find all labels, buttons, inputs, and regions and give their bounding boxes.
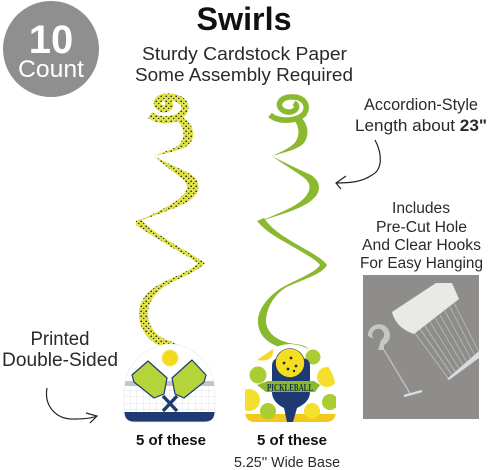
badge: 10 count: 10 (29, 18, 73, 62)
text: includes hooks (360, 200, 483, 272)
text: accordion-style length: Length about 23" (355, 117, 487, 135)
text: includes hooks: For Easy Hanging (360, 255, 483, 272)
icon: crossed handles (163, 396, 177, 411)
label: 5 of these left: 5 of these (136, 432, 206, 449)
title: Swirls (196, 1, 292, 37)
icon: right paddle (172, 360, 206, 398)
swirl base: pickleball banner (245, 344, 336, 422)
banner: PICKLEBALL (267, 382, 313, 394)
badge: 10 count: Count (18, 56, 84, 83)
arrow: to base (47, 388, 97, 423)
icon: ball (276, 348, 304, 378)
subtitle: Sturdy Cardstock Paper (142, 43, 347, 64)
arrow: to swirl length (336, 140, 380, 189)
label: printed double-sided (2, 329, 118, 371)
label: 5 of these right: 5 of these (257, 432, 327, 449)
text: accordion-style length: Accordion-Style (364, 96, 478, 114)
photo: clear hooks (363, 275, 479, 419)
swirl: green (257, 97, 327, 350)
subtitle (135, 43, 353, 85)
icon: left paddle (132, 361, 167, 398)
swirl: speckled (136, 97, 205, 349)
label: printed double-sided: Double-Sided (2, 350, 118, 371)
text: accordion-style length (355, 96, 487, 135)
swirl base: crossed paddles (124, 344, 216, 422)
subtitle: Some Assembly Required (135, 64, 353, 85)
icon: ball (162, 350, 178, 366)
text: includes hooks: And Clear Hooks (362, 237, 481, 254)
label: printed double-sided: Printed (30, 329, 90, 350)
badge: 10 count (3, 1, 99, 97)
text: includes hooks: Includes (392, 200, 450, 217)
text: includes hooks: Pre-Cut Hole (376, 219, 467, 236)
